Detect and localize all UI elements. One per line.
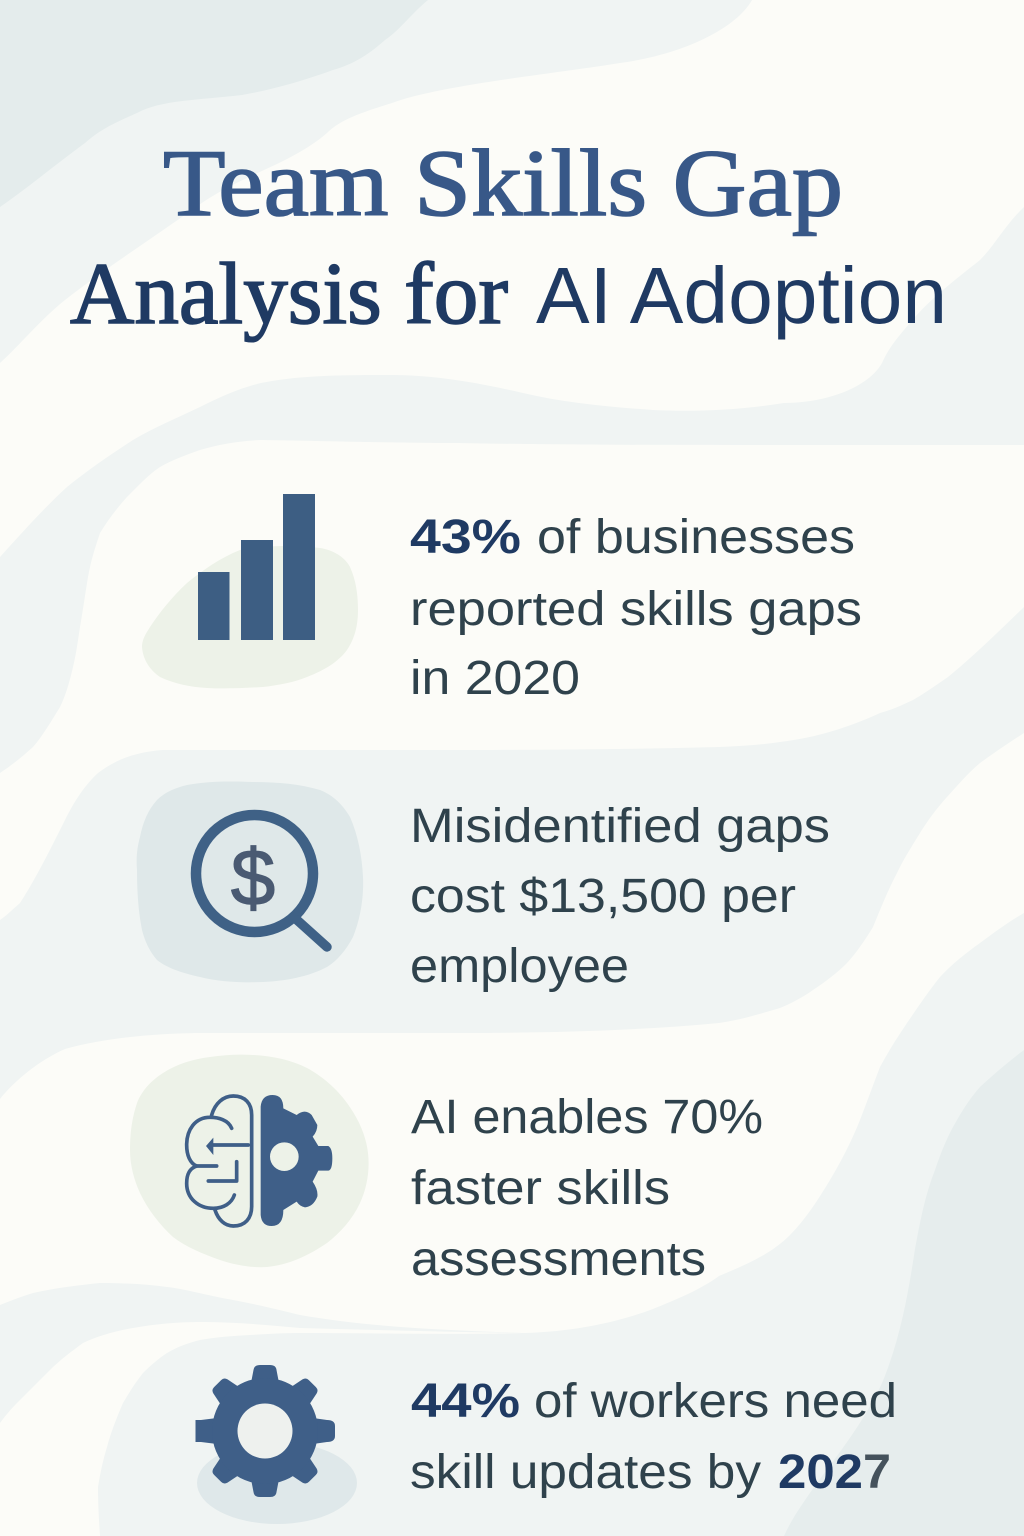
text: 44% of workers need skill updates by 2027: [410, 1375, 897, 1499]
text: 44% of workers need skill updates by 2027: 44%: [411, 1375, 520, 1428]
text: AI enables faster assessments: assessments: [411, 1233, 706, 1286]
text: 43% of businesses: in 2020: [410, 652, 580, 705]
text: misidentified gaps cost: cost $13,500 per: [410, 870, 796, 923]
text: 43% of businesses: reported skills gaps: [410, 583, 862, 636]
text: misidentified gaps cost: employee: [410, 940, 629, 993]
text: 43% of businesses: 43%: [410, 511, 521, 564]
icon: magnifier with dollar sign on blue blob: [137, 781, 363, 982]
text: 44% of workers need skill updates by 2027: of workers need: [534, 1375, 897, 1428]
text: 44% of workers need skill updates by 2027: skill updates by: [410, 1446, 761, 1499]
text: 43% of businesses: of businesses: [537, 511, 855, 564]
icon: magnifier with dollar sign on blue blob: $: [231, 833, 275, 922]
title: Analysis for: [70, 246, 508, 343]
title: [70, 130, 947, 343]
panel: workers need skill updates: [196, 1365, 897, 1524]
icon: brain and gear on green blob: [130, 1055, 369, 1267]
text: misidentified gaps cost: [410, 800, 830, 993]
panel: misidentified gaps cost: [137, 781, 830, 993]
icon: bar chart on green blob: [142, 494, 358, 688]
text: AI enables faster assessments: [411, 1091, 763, 1286]
text: 44% of workers need skill updates by 2027: 202: [778, 1446, 863, 1499]
title: AI Adoption: [536, 251, 947, 340]
panel: AI assessments: [130, 1055, 763, 1286]
text: 44% of workers need skill updates by 2027: 7: [863, 1446, 891, 1499]
text: misidentified gaps cost: Misidentified gaps: [410, 800, 830, 853]
panel: skills gaps statistic: [142, 494, 862, 705]
title: Team Skills Gap: [163, 130, 843, 236]
text: 43% of businesses: [410, 511, 862, 705]
text: AI enables faster assessments: faster skills: [411, 1162, 670, 1215]
text: AI enables faster assessments: AI enables 70%: [411, 1091, 763, 1144]
icon: gear on blue blob: [196, 1365, 357, 1524]
